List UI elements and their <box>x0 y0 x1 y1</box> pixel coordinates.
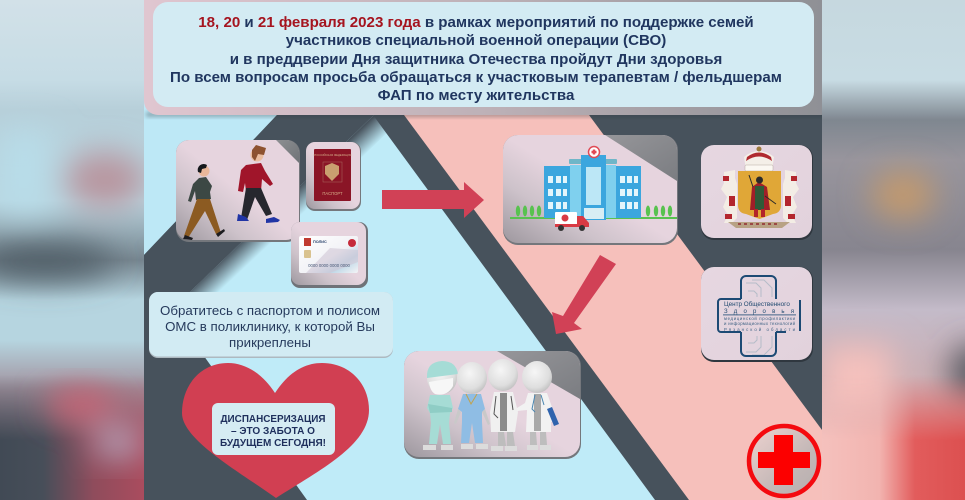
header text: и в преддверии Дня защитника Отечества пройдут Дни здоровья <box>230 51 722 68</box>
icon: man walking <box>237 145 280 223</box>
icon: hospital building <box>510 146 677 231</box>
slogan box: ДИСПАНСЕРИЗАЦИЯ <box>220 413 326 425</box>
logo: cross with text: медицинской профилактики <box>724 316 796 321</box>
dark diagonal band <box>144 115 374 292</box>
icon: doctor with clipboard <box>517 361 559 450</box>
icon: doctor figure <box>488 359 518 451</box>
soft shadow on dark band edge <box>190 116 386 292</box>
blue upper-left triangle <box>144 101 277 255</box>
header banner <box>144 0 834 117</box>
header text <box>170 14 782 104</box>
icon: OMS card: 0000 0000 0000 0000 <box>308 263 351 268</box>
card: walking people <box>176 140 300 242</box>
icon: passport <box>314 149 351 201</box>
card: hospital <box>503 135 678 245</box>
icon: blue scrubs figure <box>454 362 490 449</box>
left supporter horse <box>721 170 737 223</box>
icon: OMS card: ПОЛИС <box>313 240 327 244</box>
arrow: to clinic <box>382 182 484 218</box>
slogan box <box>212 403 335 455</box>
header text: По всем вопросам просьба обращаться к участковым терапевтам / фельдшерам <box>170 69 782 86</box>
icon: woman walking <box>183 164 225 240</box>
card: public health centre logo <box>701 267 813 362</box>
logo: cross with text <box>718 276 801 356</box>
right supporter horse <box>783 170 799 223</box>
logo: cross with text: Рязанской области <box>724 327 796 332</box>
header text: участников специальной военной операции (СВО) <box>286 32 666 49</box>
blurred left background <box>0 0 147 500</box>
pink diagonal band <box>404 115 822 500</box>
red circle badge <box>749 426 819 496</box>
card: passport <box>306 142 361 211</box>
slogan box: БУДУЩЕМ СЕГОДНЯ! <box>220 437 326 449</box>
blurred right background <box>822 0 965 500</box>
header text: 18, 20 и 21 февраля 2023 года в рамках мероприятий по поддержке семей <box>198 14 754 31</box>
logo: cross with text: Центр Общественного <box>724 300 790 308</box>
heart with slogan <box>182 363 369 498</box>
icon: passport: РОССИЙСКАЯ ФЕДЕРАЦИЯ <box>314 153 351 157</box>
callout: passport and policy <box>149 292 393 358</box>
callout: passport and policy: Обратитесь с паспортом и полисом <box>160 303 380 318</box>
arrow: to doctors <box>552 255 616 334</box>
icon: passport: ПАСПОРТ <box>322 191 343 196</box>
icon: OMS card <box>299 236 358 273</box>
callout: passport and policy: ОМС в поликлинику, к которой Вы <box>165 319 375 334</box>
card: insurance policy <box>291 222 368 288</box>
card: coat of arms <box>701 145 813 240</box>
logo: cross with text: Здоровья <box>724 309 794 315</box>
main poster panel <box>144 0 834 500</box>
callout: passport and policy: прикреплены <box>229 335 311 350</box>
icon: ambulance <box>555 212 589 231</box>
icon: coat of arms of Ryazan region <box>721 146 799 228</box>
dark poster background <box>144 114 822 500</box>
blue central diagonal field <box>171 115 655 500</box>
card: medical staff <box>404 351 581 459</box>
header text: ФАП по месту жительства <box>378 87 575 104</box>
logo: cross with text: и информационных технологий <box>724 321 796 326</box>
icon: red cross <box>758 435 810 485</box>
slogan box: – ЭТО ЗАБОТА О <box>231 425 315 437</box>
icon: surgeon figure <box>423 361 458 450</box>
